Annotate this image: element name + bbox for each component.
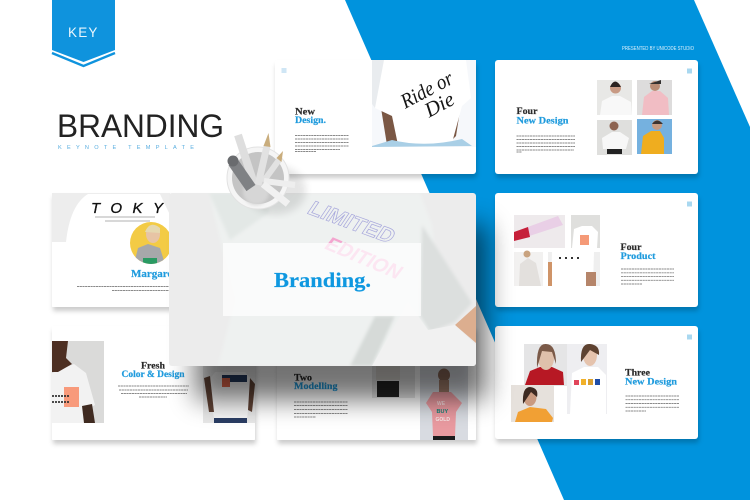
photo: pink tee back	[420, 366, 468, 440]
photo: model top	[372, 366, 415, 398]
heading: Two	[294, 374, 312, 384]
shirt print: TOKY: TOKY	[91, 200, 164, 217]
photo: pink tee back: BUY	[436, 409, 448, 415]
photo: Ride or Die t-shirt: Ride or	[396, 65, 458, 114]
slide: New Design	[275, 60, 476, 174]
pencils	[233, 135, 295, 204]
body text	[118, 386, 189, 397]
shirt print: LIMITED EDITION: LIMITED	[303, 197, 400, 248]
body text	[295, 136, 349, 152]
photo: orange pocket tee	[52, 341, 104, 423]
photo collage	[511, 344, 607, 422]
grid icon	[687, 68, 692, 74]
center slide: Branding	[169, 193, 476, 366]
grid icon	[687, 202, 692, 206]
ribbon badge: KEY: KEY	[68, 25, 99, 40]
shirt print: LIMITED EDITION	[307, 200, 404, 278]
slide: Two Modelling	[277, 326, 476, 440]
heading: Three	[625, 368, 651, 378]
slide: Two Modelling: Modelling	[294, 382, 338, 392]
pencil cup	[227, 133, 306, 214]
presented by label: PRESENTED BY UNICODE STUDIO	[622, 46, 694, 52]
slide: Three New Design	[495, 326, 698, 439]
title: BRANDING	[57, 108, 224, 144]
body text	[294, 402, 348, 417]
background blue shape	[345, 0, 750, 500]
center title: Branding.	[274, 268, 371, 292]
heading: Four	[516, 106, 538, 117]
photo: Ride or Die t-shirt	[372, 60, 472, 147]
photo grid	[597, 80, 672, 155]
photo collage	[514, 215, 600, 286]
shadow of center slide	[195, 225, 487, 400]
heading: Fresh	[141, 361, 166, 371]
slide: New Design: Design.	[295, 116, 326, 126]
heading: Four	[620, 242, 642, 253]
body text	[516, 136, 575, 152]
photo: Ride or Die t-shirt: Die	[419, 87, 458, 123]
slide: Fresh Color and Design: Color & Design	[122, 370, 185, 380]
slide: Fresh Color and Design	[52, 326, 255, 440]
slide: Margaret	[51, 193, 170, 313]
photo: striped tee	[203, 366, 255, 423]
heading: Margaret	[131, 269, 177, 280]
body text	[626, 396, 679, 411]
slide: Three New Design: New Design	[625, 376, 678, 388]
body text	[621, 269, 674, 284]
body text	[77, 286, 170, 290]
slide: Four Product: Product	[620, 251, 656, 262]
title panel	[223, 243, 421, 316]
photo: pink tee back: GOLD	[436, 417, 450, 423]
photo: pink tee back: WE	[437, 401, 446, 407]
grid icon	[687, 334, 692, 340]
slide: Four New Design	[495, 60, 698, 174]
slide: Four New Design: New Design	[516, 116, 569, 126]
ribbon badge: KEY	[52, 0, 115, 66]
round portrait	[130, 222, 172, 264]
grid icon	[282, 68, 286, 73]
subtitle: KEYNOTE TEMPLATE	[58, 145, 194, 151]
t-shirt photo	[209, 193, 476, 366]
heading: New	[295, 108, 315, 118]
shirt print: LIMITED EDITION: EDITION	[320, 234, 407, 283]
slide: Four Product	[495, 193, 698, 307]
